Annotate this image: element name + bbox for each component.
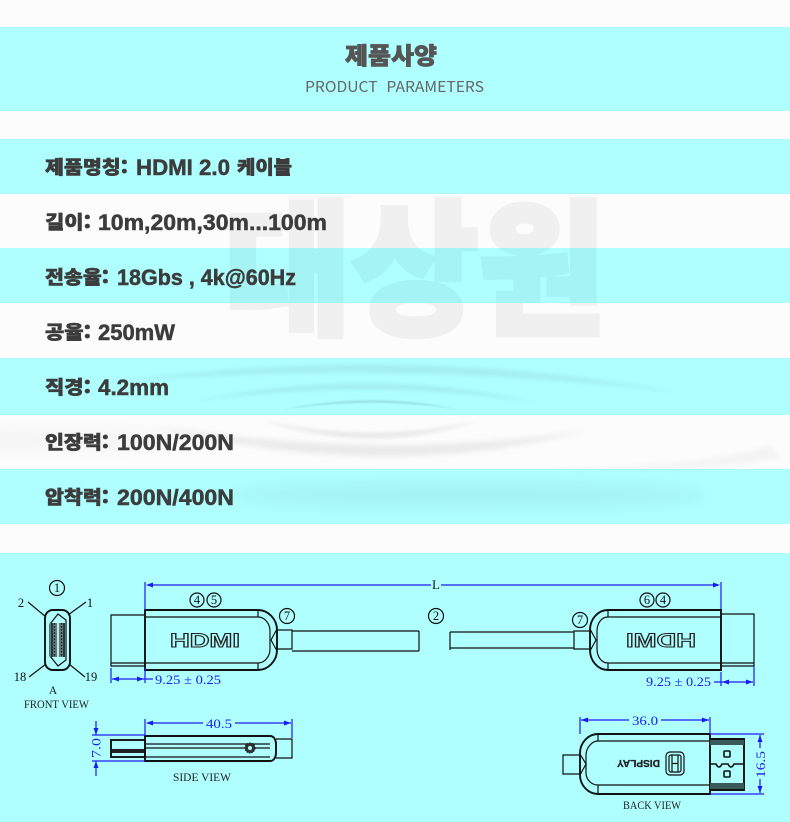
spec: transfer rate — [45, 264, 296, 290]
dimension: side length 40.5 — [145, 716, 292, 738]
dimension: right plug 9.25 — [646, 666, 754, 689]
diagram: right connector: HDMI — [626, 631, 696, 652]
diagram: right connector: 4 — [660, 593, 667, 607]
diagram: front view — [14, 580, 97, 711]
band: diameter — [0, 358, 790, 415]
spec: tensile strength — [45, 429, 234, 455]
spec: diameter — [45, 374, 169, 400]
diagram: left connector: 4 — [194, 593, 201, 607]
diagram: back view: DISPLAY — [617, 757, 660, 768]
header band — [0, 27, 790, 111]
diagram: front view: 19 — [85, 670, 97, 684]
diagram panel background — [0, 553, 790, 822]
dimension: back height 16.5: 16.5 — [753, 751, 768, 778]
dimension: side height 7.0: 7.0 — [88, 738, 104, 758]
spec: transfer rate: 전송율: — [45, 264, 109, 290]
dimension: back height 16.5 — [710, 734, 768, 794]
spec: power: 공율: — [45, 319, 91, 345]
diagram: front view: A — [49, 685, 58, 697]
spec: power: 250mW — [98, 320, 175, 345]
diagram: front view: 1 — [54, 581, 60, 595]
dimension: left plug 9.25: 9.25 ± 0.25 — [155, 672, 221, 687]
diagram: left connector — [111, 593, 419, 670]
band: crimping force — [0, 469, 790, 524]
dimension: overall length L: L — [432, 577, 440, 592]
diagram: left connector: HDMI — [170, 631, 240, 652]
spec: tensile strength: 인장력: — [45, 429, 109, 455]
dimension: overall length L — [145, 577, 721, 610]
diagram: right connector: 7 — [577, 613, 583, 627]
spec: length: 길이: — [45, 209, 91, 235]
spec: crimping force: 200N/400N — [117, 485, 234, 510]
spec: product name: HDMI 2.0 — [136, 155, 230, 180]
diagram: right connector: 6 — [644, 593, 650, 607]
callout: cable number 2: 2 — [433, 609, 439, 623]
diagram: right connector — [450, 593, 754, 670]
dimension: side length 40.5: 40.5 — [206, 716, 232, 731]
diagram: front view: 18 — [14, 670, 26, 684]
callout: cable number 2 — [428, 608, 444, 624]
spec: product name: 제품명칭: — [45, 154, 128, 180]
diagram: side view: SIDE VIEW — [173, 772, 231, 784]
spec: diameter: 4.2mm — [98, 375, 169, 400]
diagram: left connector: 7 — [284, 609, 290, 623]
diagram: front view: 1 — [87, 596, 93, 610]
diagram: back view: BACK VIEW — [623, 800, 681, 812]
dimension: side height 7.0 — [88, 721, 145, 776]
band: transfer rate — [0, 248, 790, 303]
dimension: right plug 9.25: 9.25 ± 0.25 — [646, 674, 711, 689]
spec: product name — [45, 154, 292, 180]
band: product name — [0, 139, 790, 194]
subtitle: PRODUCT PARAMETERS — [305, 76, 484, 97]
spec: product name: 케이블 — [237, 154, 292, 180]
diagram: side view — [111, 736, 292, 784]
diagram: back view — [563, 734, 744, 812]
title: 제품사양 — [345, 37, 437, 71]
diagram: front view: 2 — [18, 596, 24, 610]
spec: tensile strength: 100N/200N — [117, 430, 234, 455]
spec: diameter: 직경: — [45, 374, 91, 400]
spec: length: 10m,20m,30m...100m — [98, 210, 327, 235]
diagram: front view: FRONT VIEW — [24, 699, 89, 711]
watermark: 대상원 — [224, 155, 606, 366]
dimension: back width 36.0: 36.0 — [632, 713, 658, 728]
spec: transfer rate: 18Gbs , 4k@60Hz — [117, 265, 296, 290]
spec: crimping force: 압착력: — [45, 484, 109, 510]
dimension: back width 36.0 — [580, 713, 710, 734]
diagram: left connector: 5 — [211, 593, 217, 607]
spec: power — [45, 319, 175, 345]
water ripple — [162, 364, 669, 505]
spec: crimping force — [45, 484, 234, 510]
dimension: left plug 9.25 — [111, 668, 221, 687]
